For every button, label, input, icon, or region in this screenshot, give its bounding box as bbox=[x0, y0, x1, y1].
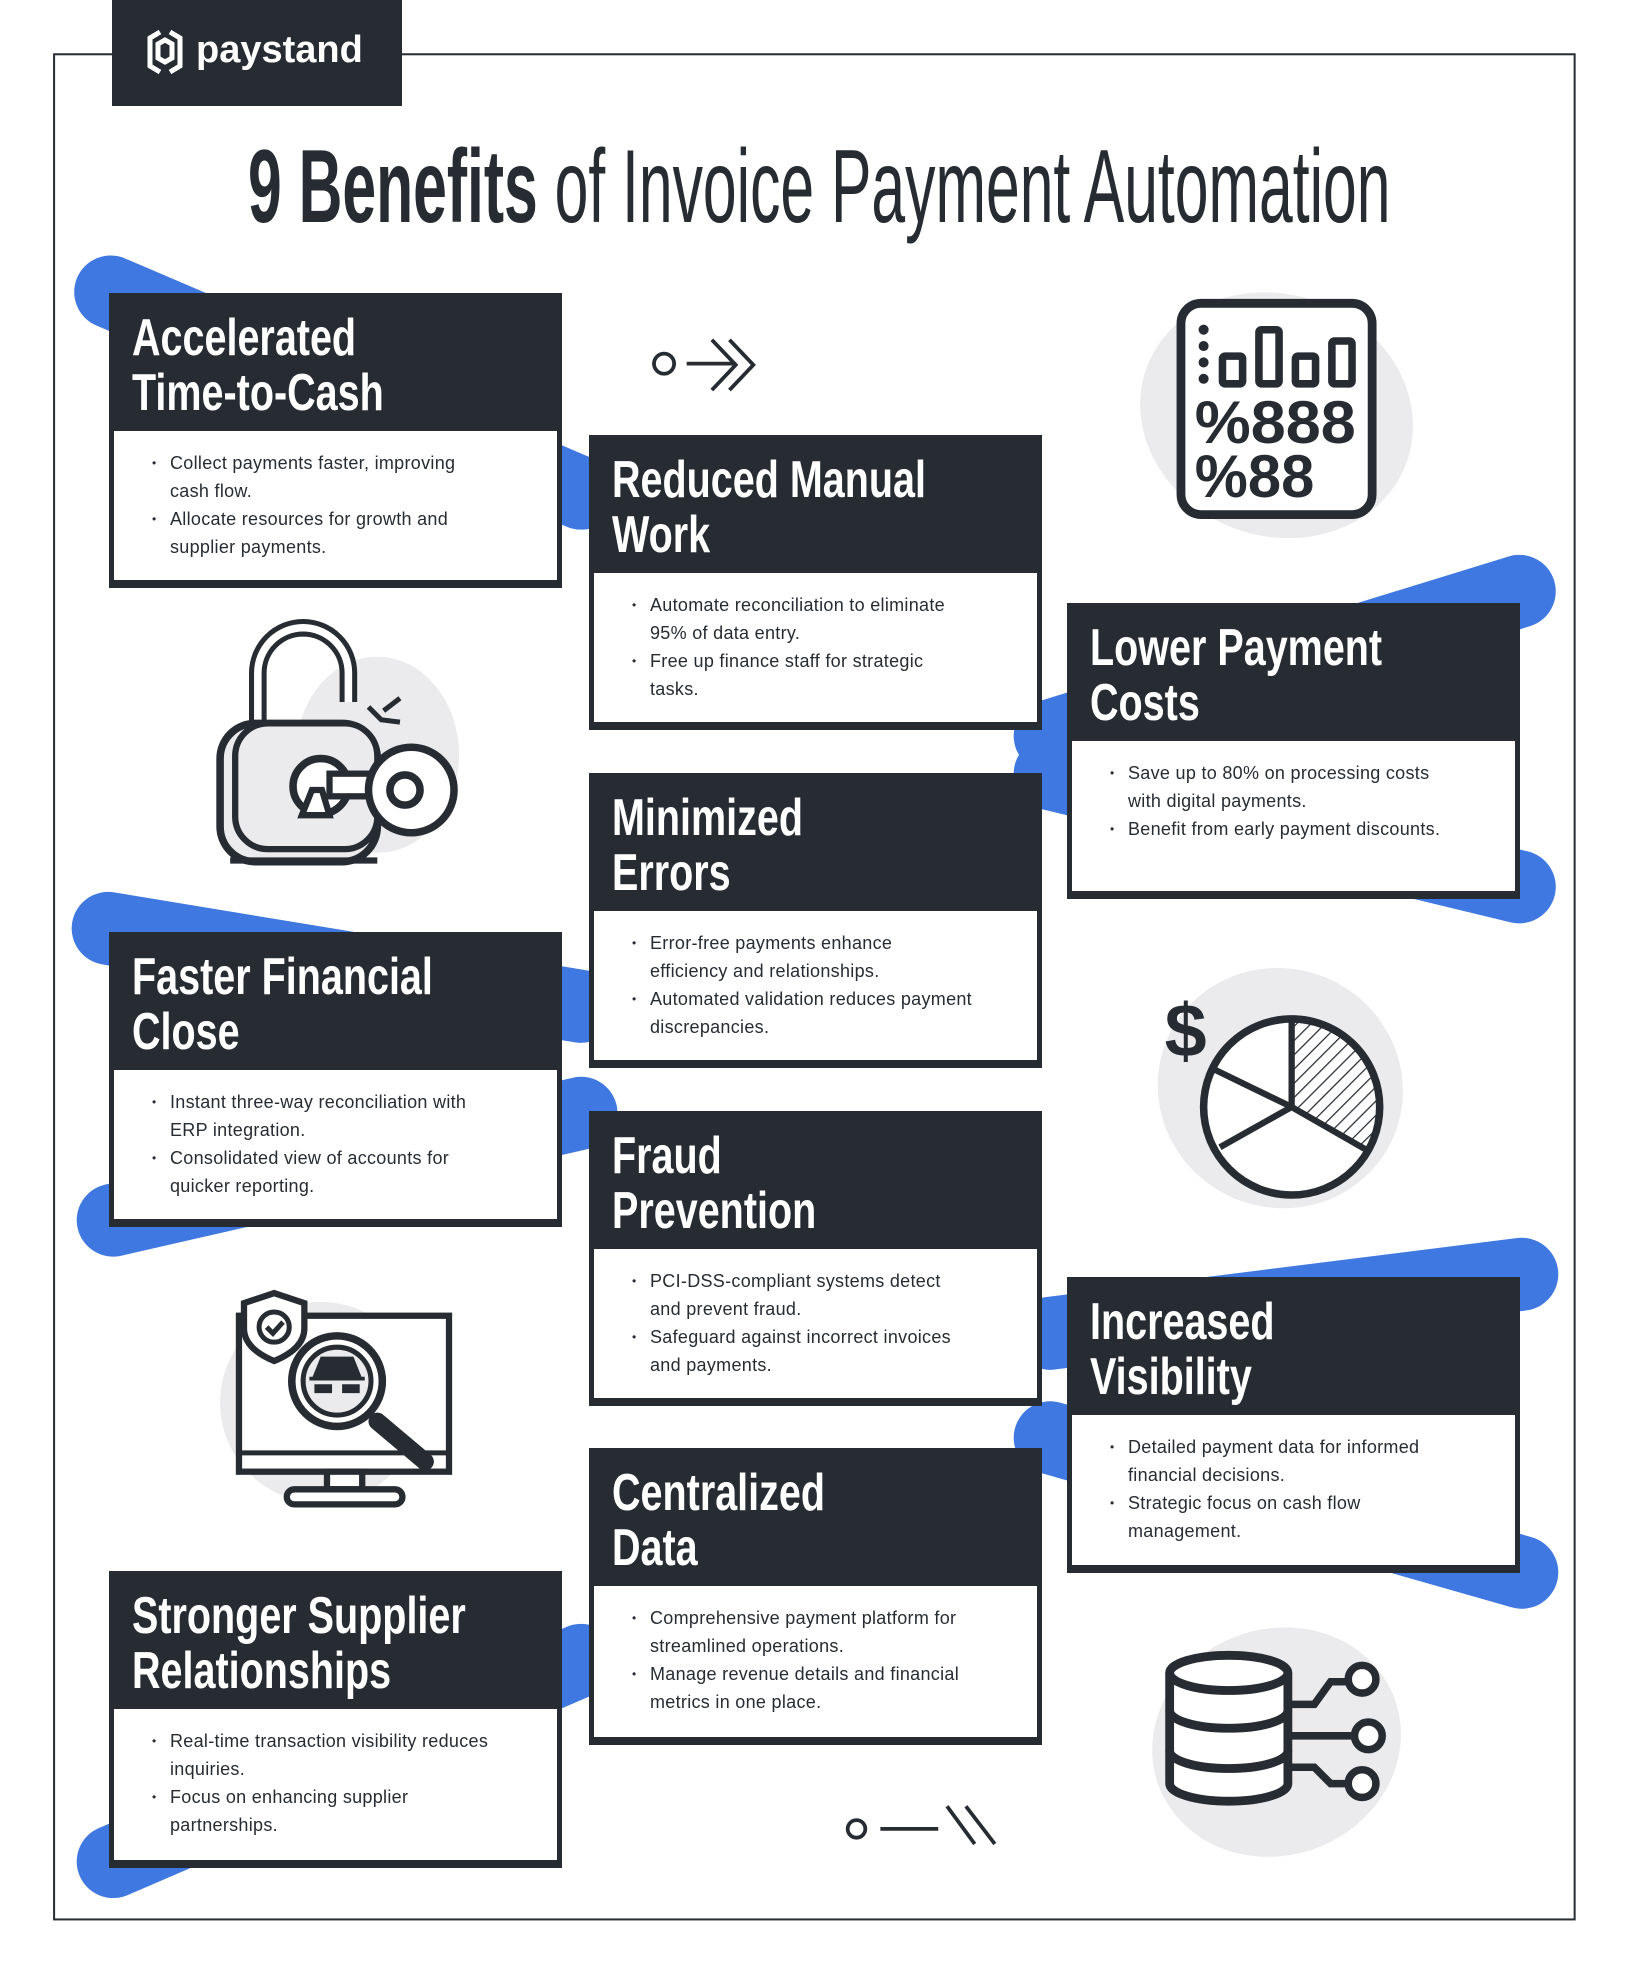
card: stronger supplier relationships: Real-time transaction visibility reduces inquiries. bbox=[170, 1731, 488, 1779]
card: reduced manual work: Free up finance staff for strategic tasks. bbox=[650, 651, 923, 699]
card: stronger supplier relationships: Focus on enhancing supplier partnerships. bbox=[170, 1787, 408, 1835]
card: minimized errors: Minimized bbox=[612, 789, 803, 847]
card: fraud prevention bbox=[589, 1111, 1042, 1406]
card: lower payment costs bbox=[1067, 603, 1520, 899]
title: 9 Benefits of Invoice Payment Automation bbox=[248, 129, 1390, 245]
card: fraud prevention: Prevention bbox=[612, 1182, 816, 1240]
card: faster financial close bbox=[109, 932, 562, 1227]
logo bbox=[112, 0, 402, 106]
card: reduced manual work: Reduced Manual bbox=[612, 451, 926, 509]
card: reduced manual work bbox=[589, 435, 1042, 730]
card: stronger supplier relationships: Relationships bbox=[132, 1642, 391, 1700]
card: centralized data: Data bbox=[612, 1519, 698, 1577]
card: centralized data bbox=[589, 1448, 1042, 1745]
card: centralized data: Manage revenue details and financial metrics in one place. bbox=[650, 1664, 959, 1712]
card: increased visibility: Visibility bbox=[1090, 1348, 1252, 1406]
icon: pie chart: $ bbox=[1165, 989, 1207, 1073]
card: accelerated time-to-cash: Allocate resources for growth and supplier payments. bbox=[170, 509, 448, 557]
icon: database bbox=[1120, 1593, 1433, 1891]
card: fraud prevention: PCI-DSS-compliant systems detect and prevent fraud. bbox=[650, 1271, 941, 1319]
card: faster financial close: Instant three-way reconciliation with ERP integration. bbox=[170, 1092, 466, 1140]
card: faster financial close: Faster Financial bbox=[132, 948, 433, 1006]
card: lower payment costs: Benefit from early payment discounts. bbox=[1128, 819, 1440, 839]
icon: lock and key bbox=[220, 628, 459, 862]
arrow: bottom bbox=[848, 1806, 995, 1844]
card: lower payment costs: Costs bbox=[1090, 674, 1200, 732]
card: increased visibility bbox=[1067, 1277, 1520, 1573]
card: stronger supplier relationships bbox=[109, 1571, 562, 1868]
card: fraud prevention: Fraud bbox=[612, 1127, 722, 1185]
card: minimized errors: Automated validation reduces payment discrepancies. bbox=[650, 989, 972, 1037]
icon: paystand mark bbox=[150, 32, 180, 72]
card: lower payment costs: Lower Payment bbox=[1090, 619, 1382, 677]
card: centralized data: Comprehensive payment platform for streamlined operations. bbox=[650, 1608, 956, 1656]
arrow: top bbox=[654, 340, 753, 390]
icon: spy monitor bbox=[220, 1293, 449, 1504]
icon: calculator bbox=[1105, 254, 1448, 576]
icon: calculator: %888 bbox=[1195, 388, 1356, 456]
icon: calculator: %88 bbox=[1195, 442, 1314, 510]
card: accelerated time-to-cash: Collect payments faster, improving cash flow. bbox=[170, 453, 455, 501]
card: minimized errors: Errors bbox=[612, 844, 731, 902]
card: lower payment costs: Save up to 80% on processing costs with digital payments. bbox=[1128, 763, 1429, 811]
card: reduced manual work: Work bbox=[612, 506, 710, 564]
logo: paystand bbox=[196, 29, 363, 71]
card: minimized errors bbox=[589, 773, 1042, 1068]
icon: pie chart bbox=[1118, 928, 1443, 1248]
card: centralized data: Centralized bbox=[612, 1464, 825, 1522]
card: accelerated time-to-cash bbox=[109, 293, 562, 588]
card: increased visibility: Detailed payment data for informed financial decisions. bbox=[1128, 1437, 1419, 1485]
card: reduced manual work: Automate reconciliation to eliminate 95% of data entry. bbox=[650, 595, 945, 643]
card: faster financial close: Consolidated view of accounts for quicker reporting. bbox=[170, 1148, 449, 1196]
card: accelerated time-to-cash: Time-to-Cash bbox=[132, 364, 384, 422]
blue stripes bbox=[108, 292, 1522, 1862]
card: increased visibility: Increased bbox=[1090, 1293, 1275, 1351]
card: fraud prevention: Safeguard against incorrect invoices and payments. bbox=[650, 1327, 951, 1375]
card: faster financial close: Close bbox=[132, 1003, 240, 1061]
card: minimized errors: Error-free payments enhance efficiency and relationships. bbox=[650, 933, 892, 981]
card: stronger supplier relationships: Stronger Supplier bbox=[132, 1587, 466, 1645]
card: accelerated time-to-cash: Accelerated bbox=[132, 309, 356, 367]
card: increased visibility: Strategic focus on cash flow management. bbox=[1128, 1493, 1361, 1541]
